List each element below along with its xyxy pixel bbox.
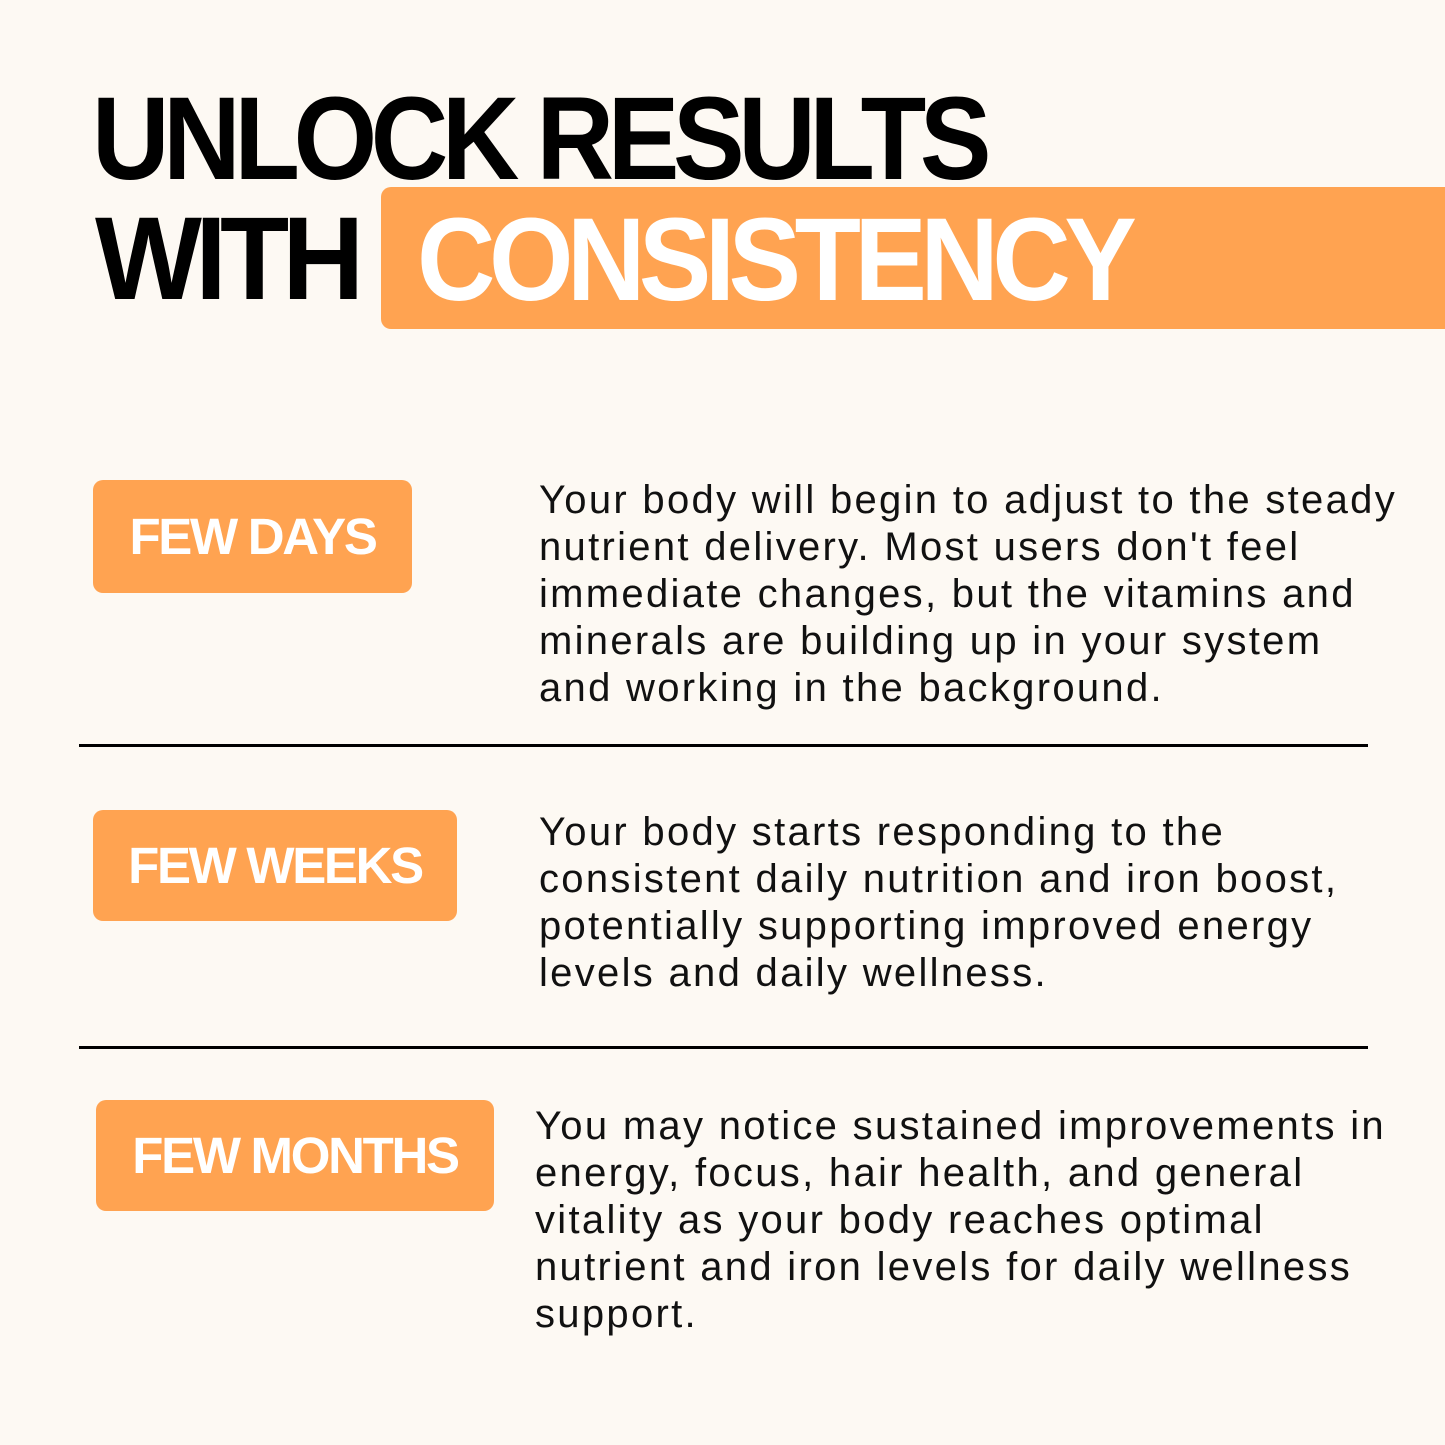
text: few weeks: levels and daily wellness. (539, 951, 1048, 995)
highlight: consistency (381, 187, 1445, 329)
text: few months: energy, focus, hair health, and general (535, 1151, 1304, 1195)
text: few days: and working in the background. (539, 666, 1164, 710)
label: few days (93, 480, 412, 593)
label: few months (96, 1100, 494, 1211)
label: few months: FEW MONTHS (132, 1127, 458, 1184)
label: few days: FEW DAYS (129, 508, 376, 565)
text: few months (535, 1104, 1386, 1336)
text: few days: minerals are building up in your system (539, 619, 1322, 663)
text: few months: support. (535, 1292, 698, 1336)
text: few months: You may notice sustained improvements in (535, 1104, 1386, 1148)
text: few weeks: potentially supporting improved energy (539, 904, 1313, 948)
text: few days (539, 478, 1397, 710)
title line 2: WITH (95, 193, 358, 325)
text: few weeks: Your body starts responding to the (539, 810, 1225, 854)
text: few weeks (539, 810, 1338, 995)
title line 1: UNLOCK RESULTS (92, 73, 985, 205)
text: few days: Your body will begin to adjust to the steady (539, 478, 1397, 522)
label: few weeks (93, 810, 457, 921)
text: few months: nutrient and iron levels for daily wellness (535, 1245, 1352, 1289)
text: few days: immediate changes, but the vitamins and (539, 572, 1356, 616)
highlight: consistency: CONSISTENCY (417, 194, 1130, 326)
text: few months: vitality as your body reaches optimal (535, 1198, 1265, 1242)
text: few days: nutrient delivery. Most users don't feel (539, 525, 1300, 569)
label: few weeks: FEW WEEKS (128, 837, 422, 894)
text: few weeks: consistent daily nutrition and iron boost, (539, 857, 1338, 901)
